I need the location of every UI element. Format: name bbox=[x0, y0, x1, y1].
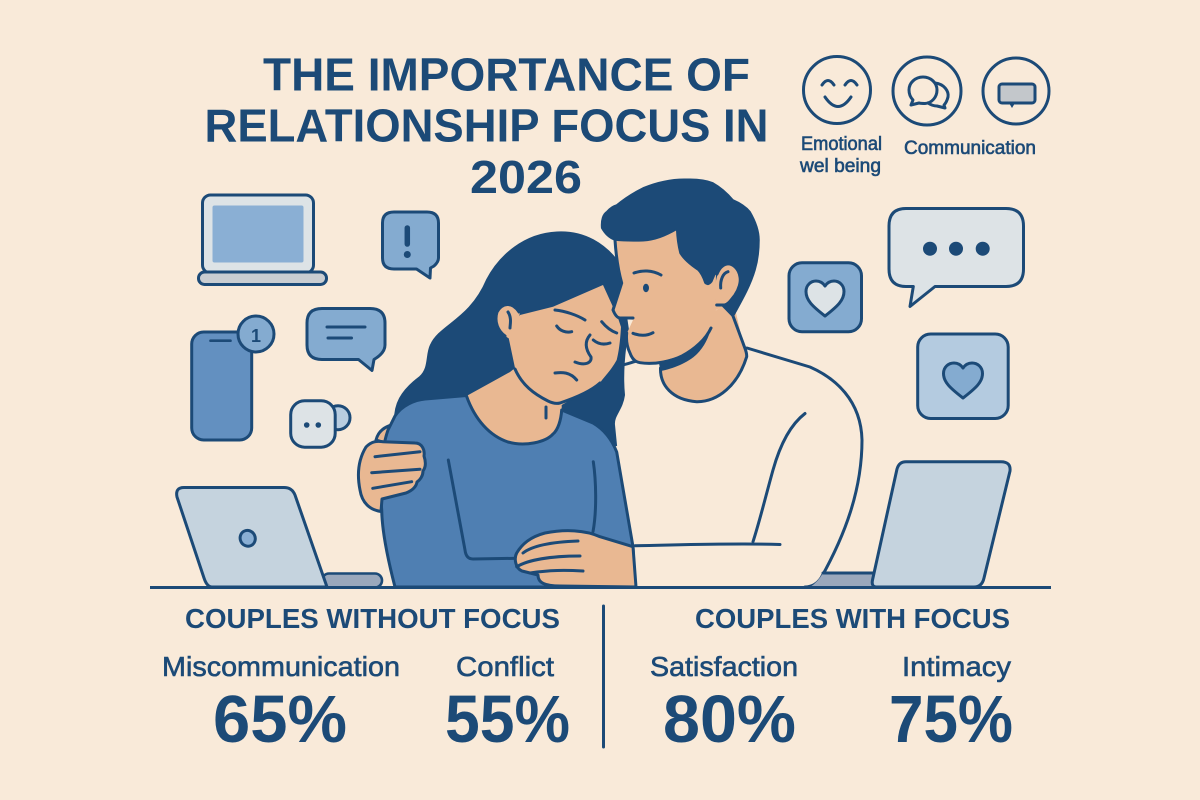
notification badge: 1 bbox=[251, 326, 261, 346]
panel: couples with focus bbox=[650, 603, 1013, 757]
title: RELATIONSHIP FOCUS IN bbox=[204, 100, 768, 152]
stat: conflict: Conflict bbox=[456, 651, 554, 682]
icon: exclamation bubble bbox=[382, 212, 438, 278]
stat: intimacy: 75% bbox=[889, 682, 1013, 757]
man's neck bbox=[660, 300, 747, 402]
man's hand on her shoulder bbox=[358, 441, 425, 512]
icon: open laptop, top left bbox=[198, 195, 326, 284]
man's hair bbox=[602, 179, 759, 317]
stat: miscommunication: 65% bbox=[213, 682, 347, 757]
woman's hair bbox=[395, 232, 628, 445]
stat: miscommunication: Miscommunication bbox=[162, 651, 400, 682]
stat: conflict bbox=[445, 651, 570, 757]
man's hand on her arm bbox=[515, 531, 636, 587]
icon row: emotional well-being and communication bbox=[799, 56, 1049, 177]
man's sweater bbox=[615, 345, 862, 587]
icon: phone with notification bbox=[192, 316, 274, 440]
stat: conflict: 55% bbox=[445, 682, 570, 757]
woman's ear bbox=[496, 304, 520, 340]
icon: text message bubble bbox=[307, 308, 385, 370]
icon: heart tile, large bbox=[918, 334, 1008, 418]
heading: COUPLES WITHOUT FOCUS bbox=[185, 603, 560, 634]
stat: intimacy: Intimacy bbox=[902, 651, 1011, 682]
label: emotional well-being bbox=[799, 134, 882, 177]
woman's sweater seams bbox=[448, 460, 596, 559]
icon: heart tile, small bbox=[789, 263, 862, 332]
heading: COUPLES WITH FOCUS bbox=[695, 603, 1010, 634]
panel: couples without focus bbox=[162, 603, 570, 757]
stat: intimacy bbox=[889, 651, 1013, 757]
icon: chat bubbles bbox=[893, 57, 961, 125]
man's facial features bbox=[634, 271, 661, 275]
man's head bbox=[602, 179, 759, 363]
icon: typing speech bubble bbox=[889, 208, 1024, 306]
line from hair to man's chin bbox=[622, 361, 637, 365]
label: emotional well-being: wel being bbox=[799, 156, 881, 177]
label: emotional well-being: Emotional bbox=[801, 134, 882, 155]
icon: laptop back, lower left bbox=[177, 488, 382, 588]
title: 2026 bbox=[470, 151, 582, 203]
icon: smiling face bbox=[804, 56, 870, 124]
title bbox=[204, 48, 768, 203]
stat: satisfaction: Satisfaction bbox=[650, 651, 798, 682]
woman's sweater bbox=[381, 396, 635, 587]
icon: laptop back, lower right bbox=[810, 462, 1010, 587]
label: communication: Communication bbox=[904, 138, 1036, 159]
woman's face and neck bbox=[466, 285, 621, 444]
stat: miscommunication bbox=[162, 651, 400, 757]
icon: mug bbox=[291, 401, 350, 447]
hand behind shoulder: thumb bbox=[376, 425, 392, 445]
illustration: couple embracing bbox=[358, 179, 862, 587]
icon: message screen bbox=[983, 58, 1049, 124]
stat: satisfaction: 80% bbox=[663, 682, 796, 757]
man's jaw shadow bbox=[658, 328, 711, 371]
man's ear bbox=[715, 264, 740, 305]
table line bbox=[150, 586, 1051, 589]
vertical divider bbox=[602, 606, 605, 747]
title: THE IMPORTANCE OF bbox=[263, 48, 750, 100]
woman's facial features bbox=[555, 310, 617, 380]
stat: satisfaction bbox=[650, 651, 798, 757]
